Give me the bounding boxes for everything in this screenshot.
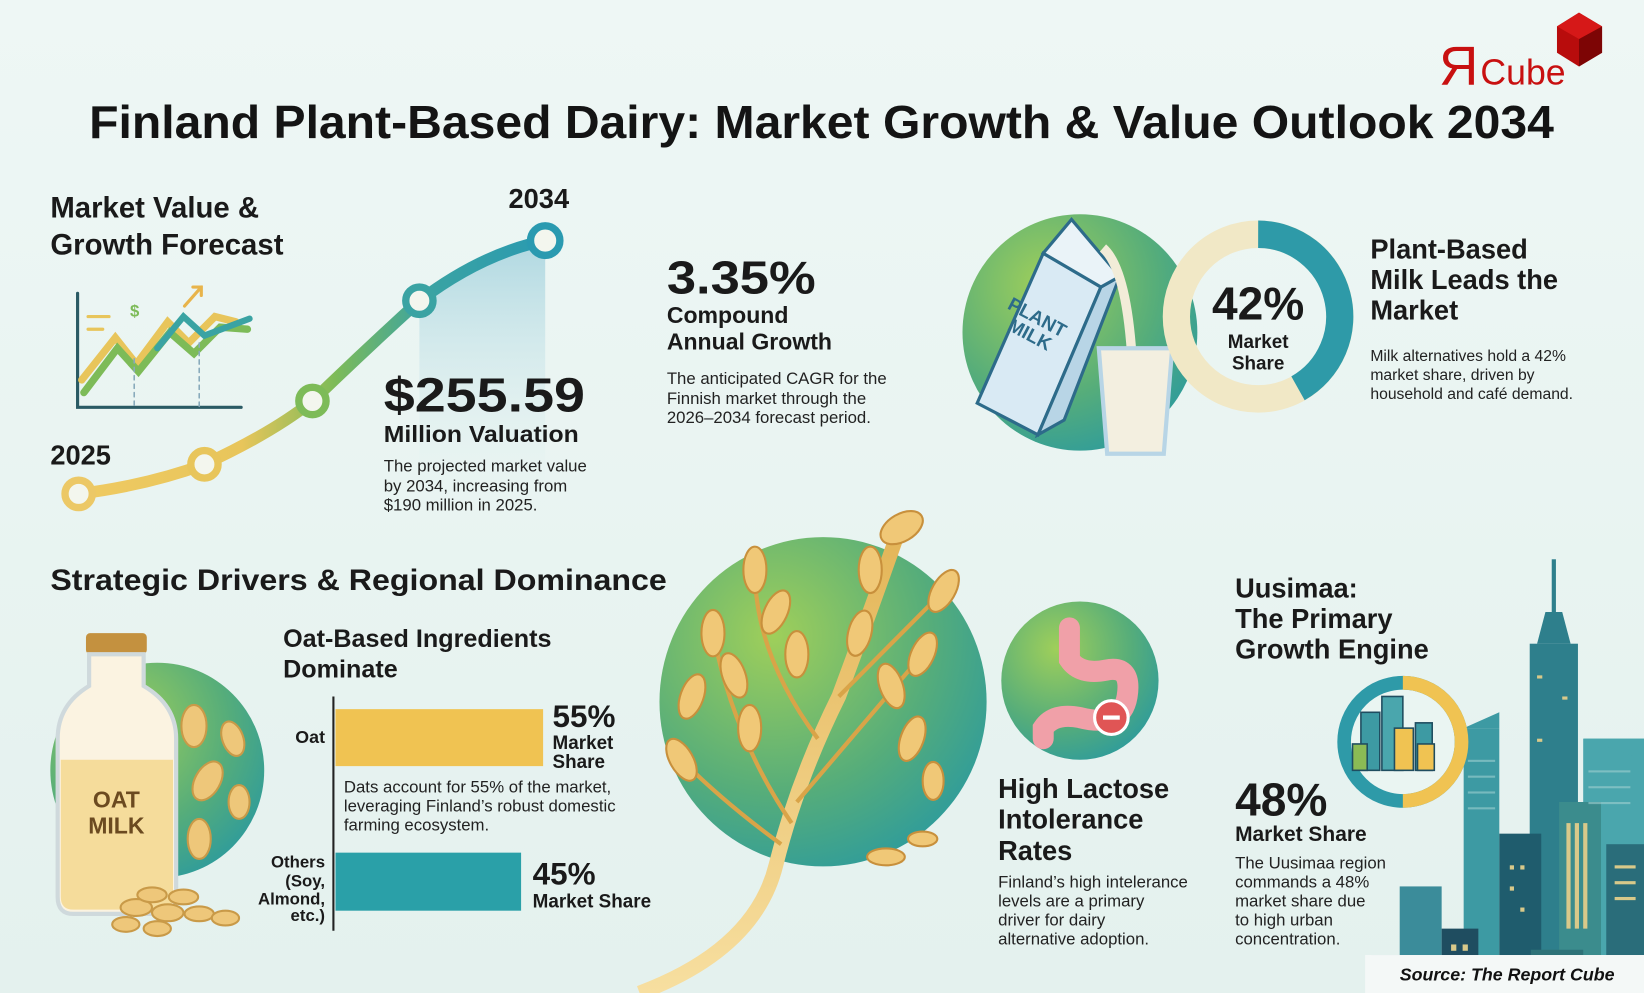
panel: oat ingredients [50,625,651,936]
text: 48% [1235,774,1386,948]
text: milk leads: Plant-Based [1370,233,1528,265]
chart: donut 42% [1176,234,1340,399]
panel: CAGR: Finnish market through the [667,389,866,408]
chart: donut 42%: Market [1228,332,1289,353]
bar chart: (Soy, [285,871,325,890]
illustration: oat plant [640,504,987,993]
text: lactose: levels are a primary [998,891,1145,910]
logo: R [1439,34,1478,96]
panel: CAGR [667,251,887,427]
panel: CAGR: The anticipated CAGR for the [667,369,887,388]
text: 48%: Market Share [1235,823,1367,846]
panel: CAGR: Annual Growth [667,328,832,354]
chart: donut 42%: 42% [1212,278,1304,330]
text: lactose: driver for dairy [998,910,1106,929]
icon: milk carton and glass: MILK [1004,315,1055,356]
bar chart: Others [271,852,325,871]
heading: Uusimaa: Growth Engine [1235,633,1429,665]
bar chart: leveraging Finland’s robust domestic [344,796,616,816]
chart: growth curve: 2034 [509,183,570,214]
panel: CAGR: 2026–2034 forecast period. [667,408,871,427]
text: lactose: High Lactose [998,773,1169,804]
text: 48%: 48% [1235,774,1327,826]
bar chart: Dats account for 55% of the market, [344,777,611,797]
heading: oat-based: Oat-Based Ingredients [283,625,551,653]
heading: oat-based: Dominate [283,655,398,683]
bar chart: Oat [295,727,325,747]
logo: Cube [1480,52,1566,92]
bar chart: Share [553,752,605,773]
logo [1439,13,1602,96]
text: milk leads [1370,233,1573,403]
text: milk leads: Milk Leads the [1370,264,1558,295]
panel: CAGR: 3.35% [667,251,816,303]
text: 48%: commands a 48% [1235,872,1369,891]
text: milk leads: Market [1370,295,1458,326]
source box: Source: The Report Cube [1400,964,1615,984]
text: lactose: alternative adoption. [998,929,1149,948]
icon: oat milk bottle: OAT [93,786,140,812]
text: lactose [998,773,1188,948]
panel: lactose [998,601,1188,948]
chart: donut 48% [1344,683,1462,801]
panel: plant milk [962,214,1573,454]
text: 48%: The Uusimaa region [1235,853,1386,872]
bar chart: Almond, [258,889,325,908]
bar chart: 45% [533,855,596,891]
text: valuation: Million Valuation [384,421,579,447]
bar chart [258,696,651,931]
panel: CAGR: Compound [667,302,788,328]
text: valuation: $190 million in 2025. [384,496,537,515]
icon: oat milk bottle: MILK [88,813,145,839]
text: milk leads: household and café demand. [1370,386,1573,403]
bar chart: Market [553,733,614,754]
heading: market value: Growth Forecast [50,228,284,261]
icon: milk carton and glass [962,214,1197,454]
heading: Uusimaa: The Primary [1235,603,1393,634]
chart: growth curve [50,183,570,508]
text: lactose: Rates [998,835,1072,866]
text: milk leads: Milk alternatives hold a 42% [1370,348,1566,365]
chart: growth curve: 2025 [50,439,111,470]
text: 48%: concentration. [1235,929,1340,948]
icon: chart: $ [130,302,140,321]
panel: market value [50,183,587,515]
heading: market value: Market Value & [50,191,259,224]
text: 48%: market share due [1235,891,1366,910]
text: valuation: by 2034, increasing from [384,477,567,496]
icon: milk carton and glass: PLANT [1004,294,1070,342]
bar chart: etc.) [291,906,325,925]
icon: chart [78,287,250,407]
text: 48%: to high urban [1235,910,1333,929]
text: lactose: Finland’s high intelerance [998,872,1188,891]
text: milk leads: market share, driven by [1370,367,1535,384]
bar chart: Market Share [533,891,651,913]
text: valuation: $255.59 [384,368,585,423]
title: Finland Plant-Based Dairy: Market Growth & Value Outlook 2034 [89,96,1554,148]
heading: strategic drivers: Strategic Drivers & Regional Dominance [50,564,667,597]
text: valuation: The projected market value [384,457,587,476]
illustration: city skyline [1371,559,1644,993]
heading: Uusimaa: Uusimaa: [1235,572,1358,603]
bar chart: farming ecosystem. [344,815,489,835]
source box [1365,955,1644,993]
bar chart: 55% [553,698,615,734]
panel: Uusimaa [1235,572,1462,948]
text: lactose: Intolerance [998,803,1143,834]
icon: stomach [1001,601,1159,760]
text: valuation [384,368,587,515]
chart: donut 42%: Share [1232,353,1284,374]
icon: oat milk bottle [50,633,264,936]
